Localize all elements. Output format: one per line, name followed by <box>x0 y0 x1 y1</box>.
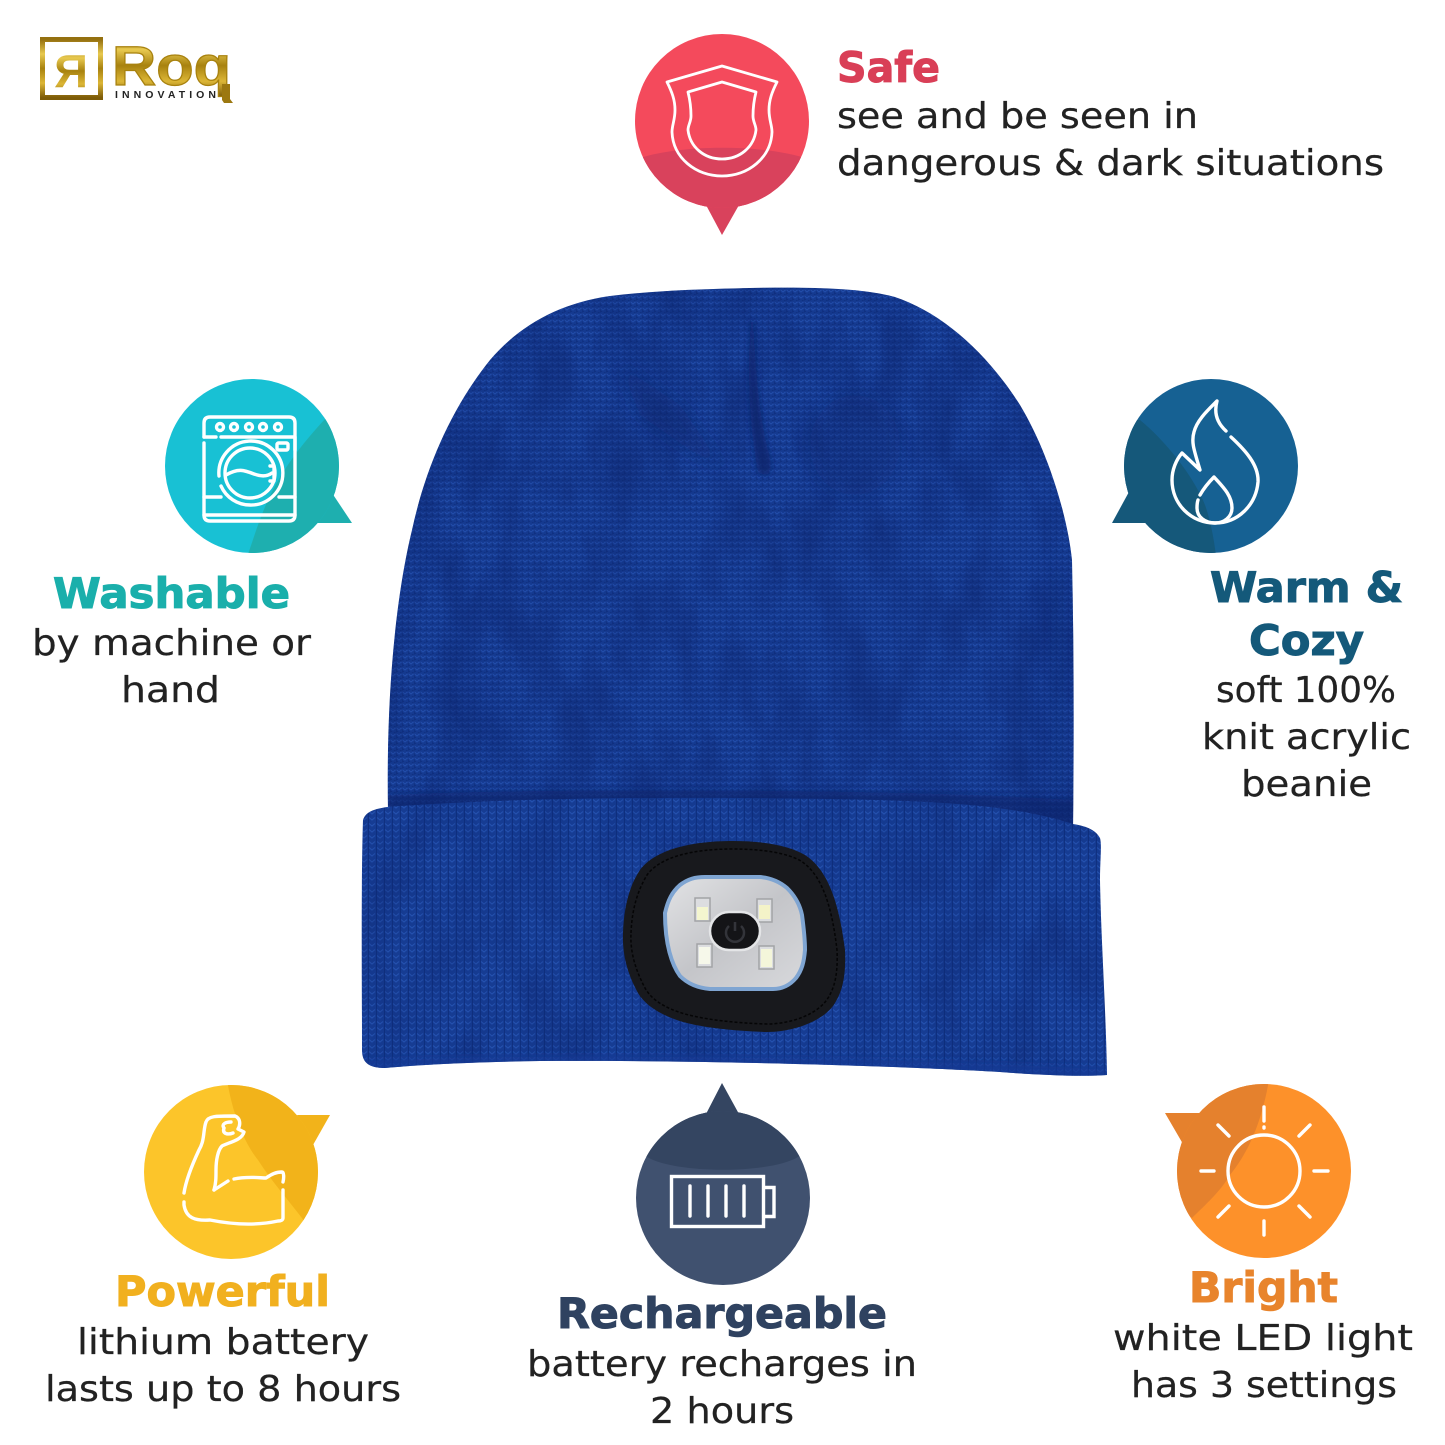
text: Washable: Washable <box>53 569 290 618</box>
text: Warm and Cozy: knit acrylic <box>1202 717 1411 758</box>
text: Warm and Cozy: Warm & <box>1210 563 1403 612</box>
icon: flexed arm <box>184 1116 284 1224</box>
pin: navy battery <box>630 1083 816 1285</box>
LED lens <box>665 877 805 989</box>
logo mark: mirrored R in square frame <box>42 40 100 98</box>
beanie crown <box>380 280 1080 830</box>
text: Warm and Cozy: soft 100% <box>1216 670 1396 711</box>
text: Bright: has 3 settings <box>1131 1365 1397 1406</box>
text: Rechargeable: battery recharges in <box>527 1344 917 1385</box>
icon: battery <box>672 1176 774 1226</box>
text: Warm and Cozy: Cozy <box>1249 616 1364 665</box>
text: Safe: see and be seen in <box>837 96 1198 137</box>
callout: Warm and Cozy <box>1110 379 1411 805</box>
pin: blue flame <box>1110 379 1298 556</box>
callout: Rechargeable <box>527 1083 917 1432</box>
pin: teal washer <box>165 379 352 560</box>
text: Powerful <box>45 1267 401 1410</box>
pin: red shield <box>630 34 815 235</box>
beanie folded cuff <box>360 795 1110 1080</box>
text: Bright: Bright <box>1189 1263 1338 1312</box>
text: Safe: Safe <box>837 43 940 92</box>
text: Rechargeable <box>527 1289 917 1432</box>
callout: Bright <box>1113 1080 1413 1406</box>
logo: Roq Innovation <box>42 34 233 103</box>
text: Washable: hand <box>121 670 220 711</box>
icon: washing machine <box>204 417 295 521</box>
pin: orange sun <box>1165 1080 1351 1258</box>
text: Safe: dangerous & dark situations <box>837 143 1384 184</box>
text: Powerful: Powerful <box>115 1267 330 1316</box>
text: Rechargeable: 2 hours <box>650 1391 794 1432</box>
text: Warm and Cozy: beanie <box>1241 764 1372 805</box>
text: Bright: white LED light <box>1113 1318 1413 1359</box>
logo wordmark: Roq <box>112 34 231 97</box>
text: Washable <box>32 569 311 711</box>
icon: flame <box>1172 401 1258 523</box>
LED bulbs <box>695 898 774 969</box>
text: Powerful: lasts up to 8 hours <box>45 1369 401 1410</box>
text: Bright <box>1113 1263 1413 1406</box>
callout: Safe <box>630 34 1384 235</box>
text: Safe <box>837 43 1384 184</box>
callout: Powerful <box>45 1080 401 1410</box>
text: Powerful: lithium battery <box>77 1322 369 1363</box>
logo tagline: INNOVATION <box>115 89 216 101</box>
text: Warm and Cozy <box>1202 563 1411 805</box>
text: Rechargeable: Rechargeable <box>557 1289 887 1338</box>
beanie photo illustration <box>360 280 1110 1080</box>
icon: sun <box>1201 1107 1328 1235</box>
icon: shield <box>667 66 777 176</box>
LED light module patch <box>623 841 845 1032</box>
callout: Washable <box>32 379 352 711</box>
pin: yellow arm <box>144 1080 330 1259</box>
power button <box>710 912 760 950</box>
text: Washable: by machine or <box>32 623 311 664</box>
logo mark: mirrored R in square frame: R <box>54 45 88 97</box>
